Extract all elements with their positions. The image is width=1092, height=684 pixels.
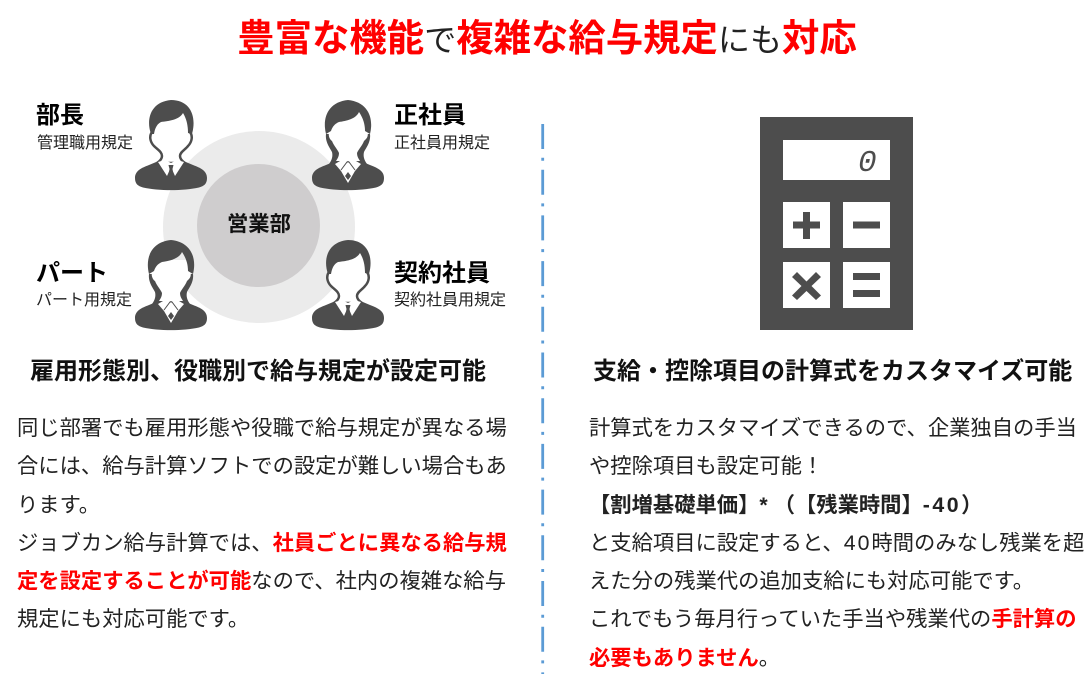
text block: left column: ります。	[17, 493, 100, 517]
text block: right column: えた分の残業代の追加支給にも対応可能です。	[589, 569, 1034, 593]
text block: right column: や控除項目も設定可能！	[589, 454, 823, 478]
text block: left column: 同じ部署でも雇用形態や役職で給与規定が異なる場	[17, 416, 507, 440]
label: manager: 部長	[36, 102, 84, 129]
heading: right column: 支給・控除項目の計算式をカスタマイズ可能	[593, 358, 1072, 385]
icon: calculator	[760, 117, 913, 330]
text block: left column	[17, 416, 507, 631]
label: contract employee: 契約社員	[394, 260, 490, 287]
text block: right column: 計算式をカスタマイズできるので、企業独自の手当	[589, 416, 1077, 440]
label: part-time: パート用規定	[36, 292, 132, 309]
label: manager: 管理職用規定	[37, 135, 133, 152]
text block: right column: 【割増基礎単価】*（【残業時間】-40）	[589, 493, 982, 517]
label: part-time	[36, 260, 132, 309]
icon: male contract employee	[312, 240, 384, 330]
icon: female regular employee	[312, 100, 384, 190]
text block: right column: 必要もありません。	[589, 646, 780, 670]
label: part-time: パート	[36, 260, 108, 287]
label: contract employee	[394, 260, 506, 309]
label: regular employee: 正社員用規定	[394, 135, 490, 152]
text block: left column: ジョブカン給与計算では、社員ごとに異なる給与規	[17, 531, 507, 555]
icon: calculator: 0	[858, 146, 877, 181]
text block: right column	[589, 416, 1084, 670]
text block: left column: 合には、給与計算ソフトでの設定が難しい場合もあ	[17, 454, 507, 478]
heading: left column: 雇用形態別、役職別で給与規定が設定可能	[30, 358, 486, 385]
label: sales department: 営業部	[227, 212, 291, 236]
title: 豊富な機能で複雑な給与規定にも対応	[237, 17, 857, 59]
text block: right column: と支給項目に設定すると、40時間のみなし残業を超	[589, 531, 1084, 555]
label: contract employee: 契約社員用規定	[394, 292, 506, 309]
text block: left column: 定を設定することが可能なので、社内の複雑な給与	[17, 569, 506, 593]
text block: right column: これでもう毎月行っていた手当や残業代の手計算の	[589, 607, 1077, 631]
label: regular employee: 正社員	[394, 102, 466, 129]
label: regular employee	[394, 102, 490, 152]
panel: employment types diagram	[36, 100, 506, 330]
label: manager	[36, 102, 133, 152]
icon: male manager	[135, 100, 207, 190]
text block: left column: 規定にも対応可能です。	[17, 607, 249, 631]
icon: female part-timer	[135, 240, 207, 330]
